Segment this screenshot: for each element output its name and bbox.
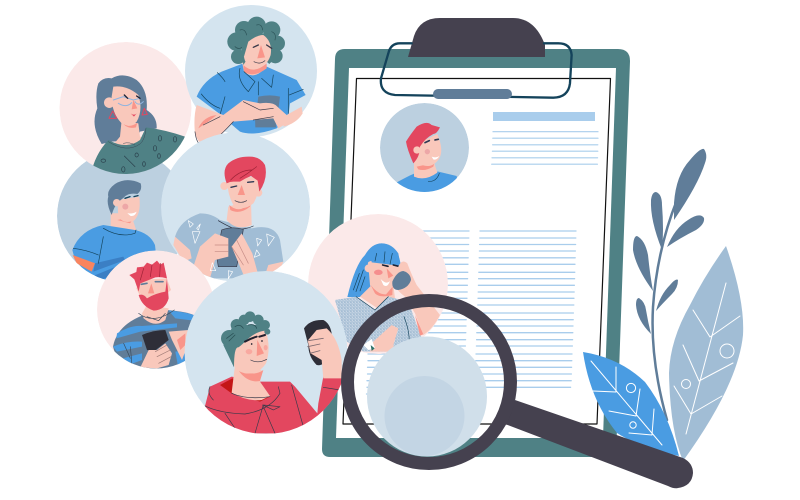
dark sprig plant <box>633 149 706 420</box>
small blue leaf <box>583 352 679 456</box>
figure <box>93 75 185 174</box>
circle background <box>57 161 178 280</box>
right text column <box>475 231 576 387</box>
stem <box>653 200 677 420</box>
figure <box>194 17 306 146</box>
person: woman with glasses <box>60 42 192 187</box>
circle background <box>308 214 448 354</box>
profile summary lines <box>492 132 598 164</box>
profile text lines <box>492 112 598 164</box>
leaf blade <box>669 246 743 461</box>
body text columns <box>366 231 576 394</box>
circle background <box>60 42 192 174</box>
profile title bar <box>493 112 595 121</box>
leaf blade <box>583 352 679 456</box>
magnifying glass <box>348 300 693 488</box>
leaf dots <box>626 383 636 428</box>
leaf veins <box>674 283 740 434</box>
outer glare circle <box>367 336 487 456</box>
clip base <box>408 18 545 57</box>
circle background <box>185 5 317 137</box>
figure <box>112 260 194 368</box>
figure <box>205 311 345 433</box>
figure <box>173 157 283 279</box>
lens glare <box>367 336 487 456</box>
leaf dots <box>682 344 734 388</box>
big pale leaf <box>669 246 743 461</box>
circle background <box>184 271 348 434</box>
person: hoodie man with phone <box>184 271 348 434</box>
figure <box>335 243 440 352</box>
clipboard board <box>322 49 630 457</box>
person: red hair man <box>161 132 310 282</box>
person: woman on the phone <box>308 214 448 354</box>
clip wire loop <box>381 43 572 98</box>
profile portrait on paper <box>380 103 469 197</box>
figure <box>72 180 157 287</box>
paper sheet back <box>336 68 616 438</box>
portrait person <box>396 122 457 192</box>
lens ring <box>348 300 510 464</box>
circle background <box>97 250 212 351</box>
left text column <box>366 231 469 394</box>
inner glare circle <box>384 376 464 456</box>
person: blue t-shirt man <box>57 161 178 280</box>
circle background <box>161 132 310 282</box>
portrait background <box>380 103 469 192</box>
sprig leaves <box>674 149 706 220</box>
clipboard <box>322 18 630 457</box>
leaf veins <box>591 361 662 445</box>
handle <box>505 400 693 488</box>
clip pill <box>433 89 512 99</box>
person: bearded man <box>97 250 215 370</box>
paper sheet outlined <box>343 78 610 424</box>
person: curly hair man <box>185 5 317 146</box>
